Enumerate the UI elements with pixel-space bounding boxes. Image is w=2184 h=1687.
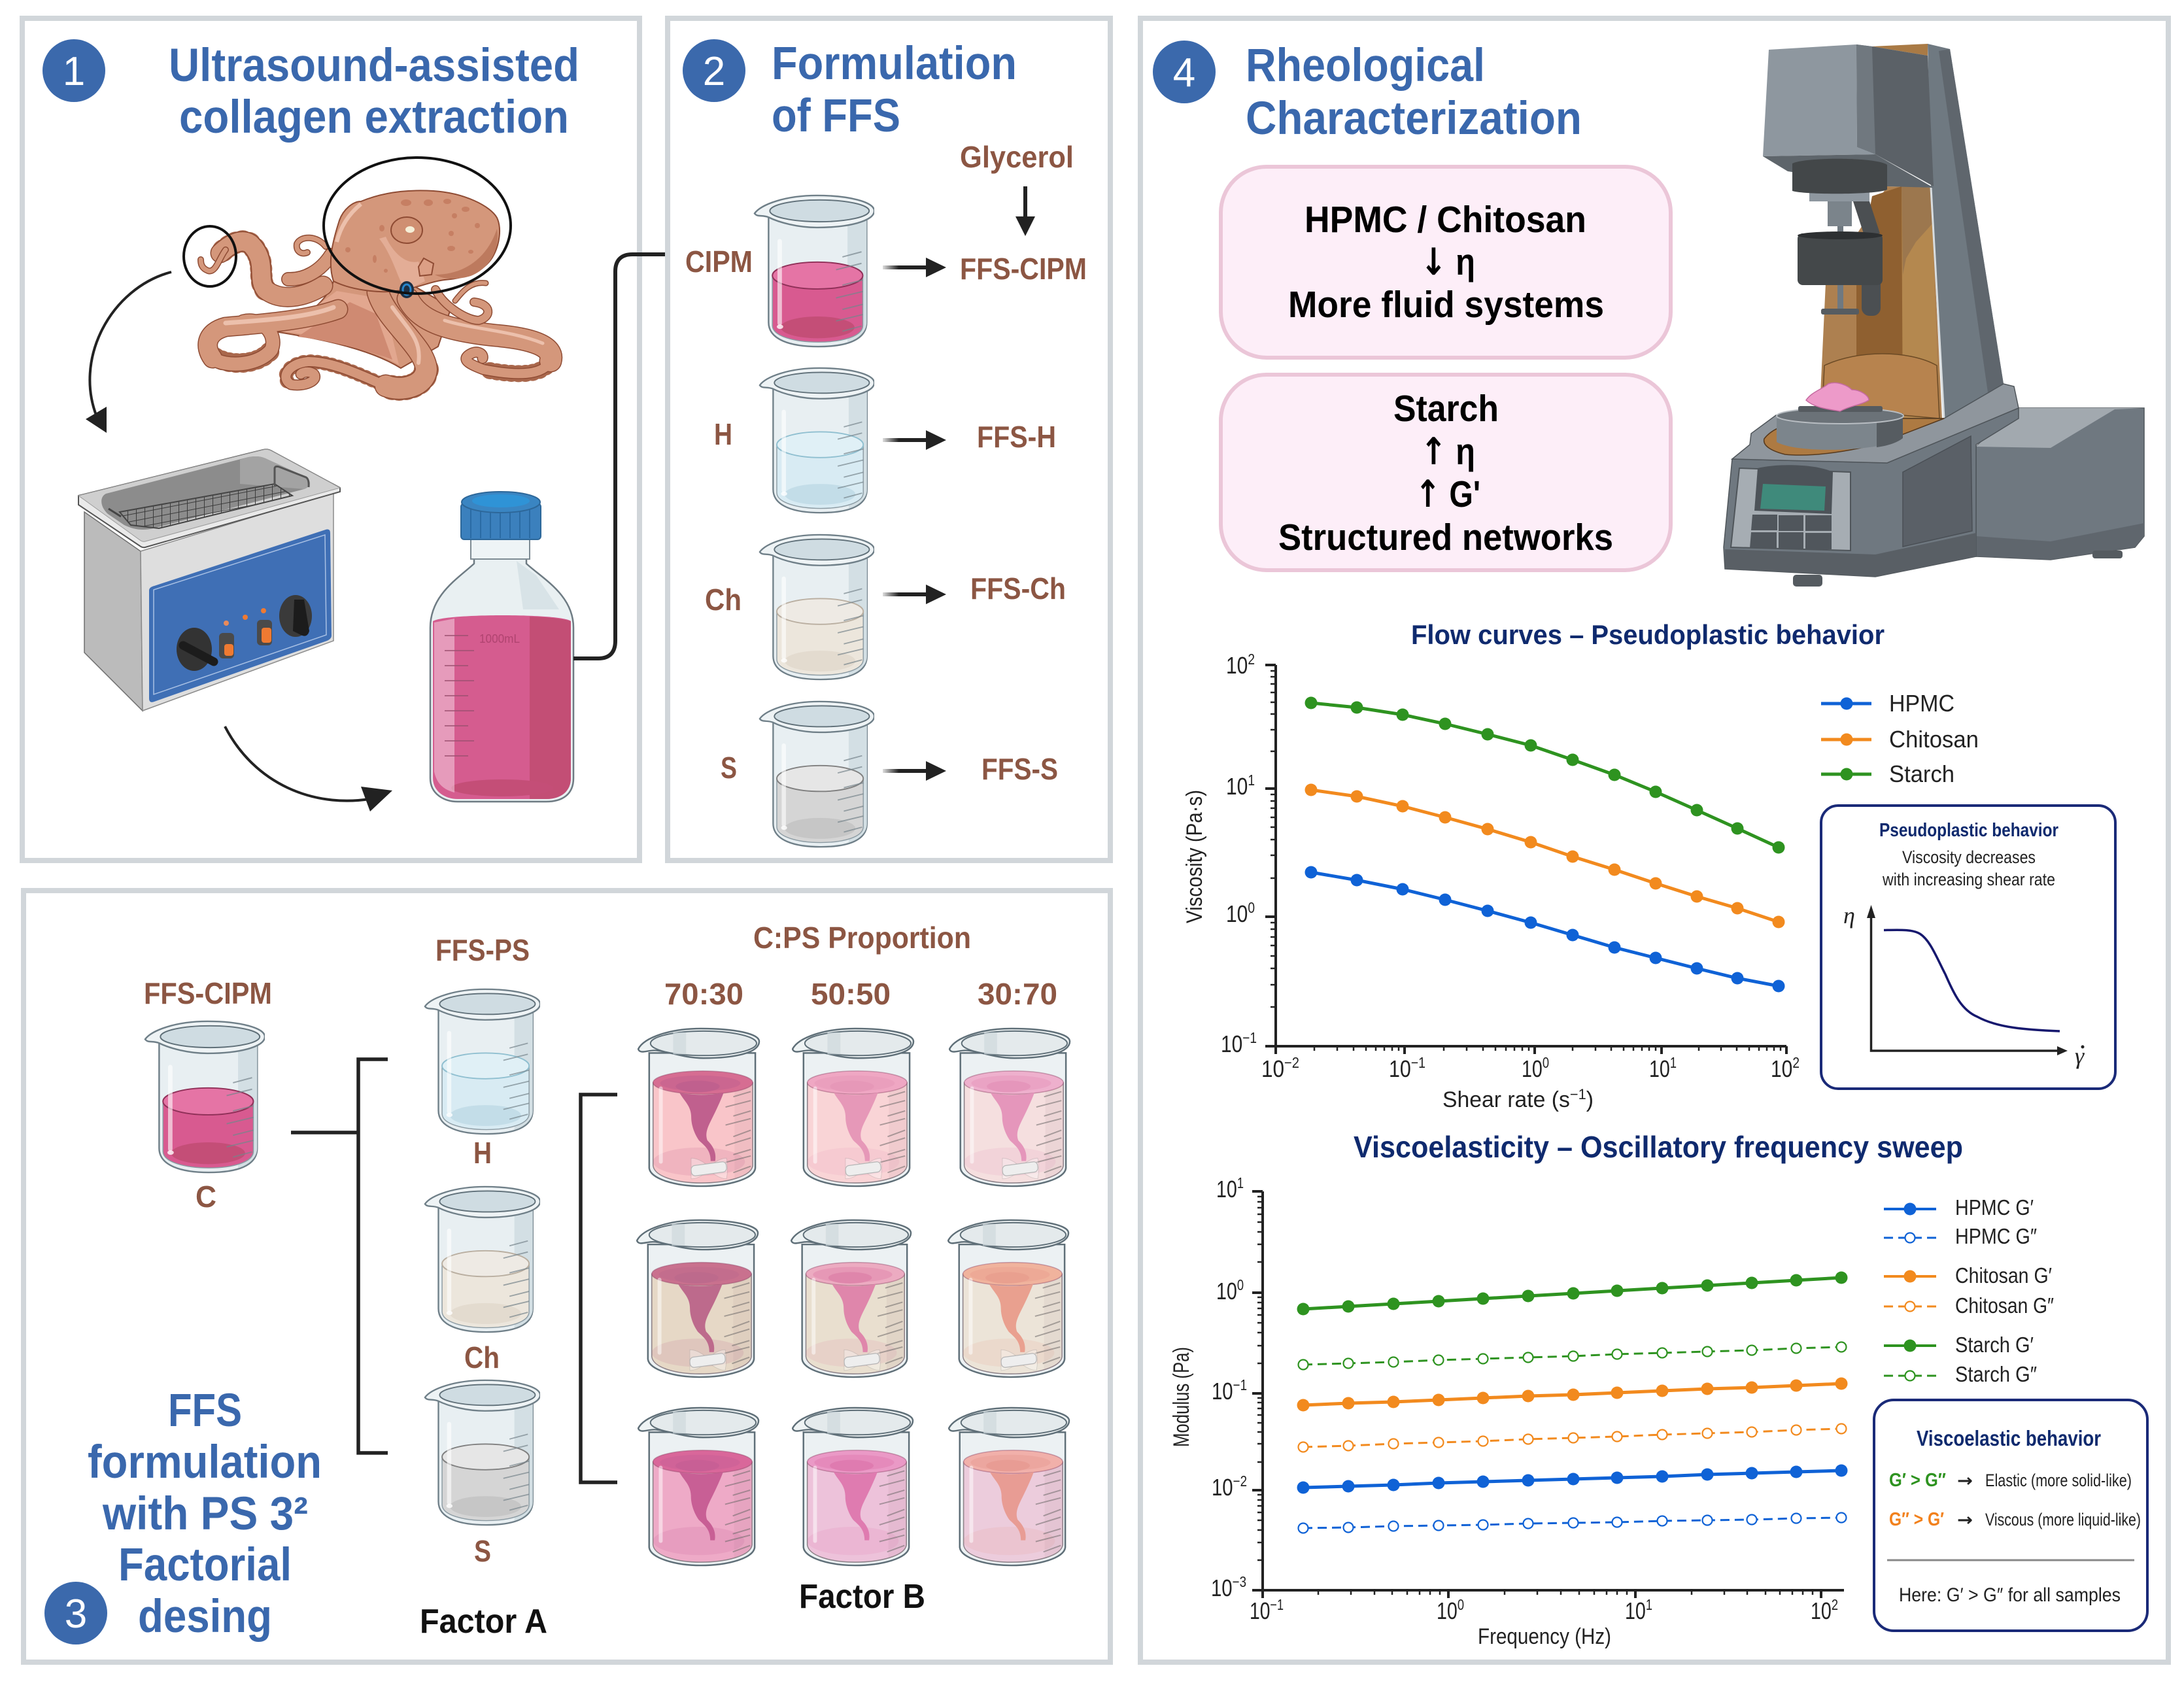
y tick labels: viscoelasticity: 10	[1216, 1278, 1242, 1304]
x tick labels: viscoelasticity: 10	[1250, 1597, 1276, 1624]
y tick labels: flow curves: 10	[1226, 900, 1252, 927]
label: FFS-CIPM: FFS-CIPM	[960, 252, 1087, 286]
axes: flow curves	[1265, 665, 1786, 1054]
label: Ch: Ch	[464, 1340, 500, 1374]
callout: starch: Structured networks	[1278, 517, 1613, 558]
label: FFS-S: FFS-S	[981, 752, 1058, 786]
callout: HPMC / chitosan: HPMC / Chitosan	[1305, 199, 1586, 241]
badge 3	[44, 1582, 107, 1644]
inset: pseudoplastic behavior: Pseudoplastic behavior	[1879, 820, 2058, 841]
heading: FFS formulation with PS 3² factorial desing: formulation	[88, 1437, 322, 1488]
y tick labels: flow curves: 10	[1226, 773, 1252, 800]
series: chitosan G''	[1303, 1429, 1841, 1447]
callout: tentacle circle	[184, 226, 236, 286]
connector: bottle to CIPM	[573, 254, 676, 658]
callout: HPMC / chitosan: More fluid systems	[1288, 284, 1604, 326]
beaker: H 30:70	[949, 1029, 1070, 1186]
chart title: flow curves: Flow curves – Pseudoplastic behavior	[1411, 619, 1885, 650]
heading: formulation of FFS	[772, 38, 1017, 142]
arrow: H to FFS-H	[883, 430, 946, 450]
legend: viscoelasticity	[1884, 1195, 2054, 1386]
inset: viscoelastic behavior: →	[1957, 1510, 1973, 1530]
axis label: modulus: Modulus (Pa)	[1169, 1347, 1194, 1447]
beaker: H	[760, 368, 874, 513]
x tick labels: flow curves: 10	[1771, 1055, 1797, 1082]
legend: viscoelasticity: Starch G″	[1955, 1362, 2037, 1386]
x tick labels: viscoelasticity: 0	[1458, 1596, 1464, 1613]
y tick labels: viscoelasticity: 1	[1237, 1174, 1244, 1191]
y tick labels: viscoelasticity: −1	[1233, 1376, 1247, 1393]
beaker: Ch 30:70	[948, 1220, 1068, 1377]
legend: flow curves: Starch	[1889, 760, 1954, 787]
heading: ultrasound-assisted collagen extraction: collagen extraction	[179, 92, 569, 143]
arrow: S to FFS-S	[883, 761, 946, 781]
badge 2	[683, 39, 745, 102]
panel 4: rheological characterization	[1140, 18, 2168, 1662]
y tick labels: viscoelasticity: −3	[1233, 1573, 1246, 1590]
label: FFS-PS: FFS-PS	[435, 933, 530, 967]
inset: pseudoplastic behavior: η	[1843, 902, 1855, 929]
x tick labels: flow curves: 0	[1543, 1054, 1549, 1071]
inset: viscoelastic behavior: Elastic (more solid-like)	[1985, 1471, 2132, 1490]
x tick labels: viscoelasticity: 10	[1625, 1597, 1651, 1624]
legend: viscoelasticity: HPMC G″	[1955, 1224, 2037, 1248]
label: S: S	[721, 751, 737, 785]
x tick labels: viscoelasticity	[1250, 1596, 1838, 1624]
heading: FFS formulation with PS 3² factorial desing: with PS 3²	[102, 1488, 308, 1540]
callout: HPMC / chitosan: ↓ η	[1420, 241, 1475, 284]
y tick labels: viscoelasticity	[1211, 1174, 1247, 1601]
callout: starch	[1221, 375, 1671, 570]
chart: flow curves	[1182, 619, 2115, 1112]
label: 30:70: 30:70	[978, 977, 1057, 1011]
callout: mantle circle	[324, 158, 511, 294]
callout: starch: ↑ η	[1420, 430, 1475, 473]
heading: rheological characterization: Rheological	[1246, 40, 1485, 92]
chart: viscoelasticity	[1169, 1130, 2147, 1649]
beaker: CIPM	[755, 196, 874, 347]
icon: pink liquid bottle: 1000mL	[479, 632, 520, 645]
x tick labels: flow curves: 1	[1670, 1054, 1677, 1071]
y tick labels: flow curves: 10	[1226, 652, 1252, 679]
label: H: H	[473, 1136, 492, 1170]
label: 70:30: 70:30	[664, 977, 743, 1011]
x tick labels: flow curves: −1	[1411, 1054, 1425, 1071]
beaker: S 70:30	[638, 1408, 759, 1565]
inset: viscoelastic behavior: Here: G′ > G″ for all samples	[1899, 1584, 2121, 1606]
beaker: S 30:70	[949, 1408, 1069, 1565]
beaker: S 50:50	[793, 1408, 913, 1565]
arrow: bath to bottle	[225, 726, 392, 811]
beaker: S	[425, 1380, 540, 1525]
x tick labels: flow curves: 2	[1792, 1054, 1800, 1071]
inset: pseudoplastic behavior: γ	[2075, 1043, 2085, 1069]
x tick labels: flow curves: 10	[1261, 1055, 1288, 1082]
inset: viscoelastic behavior	[1874, 1400, 2147, 1631]
beaker: H 70:30	[638, 1029, 759, 1186]
x tick labels: viscoelasticity: 2	[1832, 1596, 1838, 1613]
chart title: viscoelasticity: Viscoelasticity – Oscillatory frequency sweep	[1354, 1130, 1963, 1164]
inset: viscoelastic behavior: G″ > G′	[1889, 1509, 1944, 1530]
bracket: C to factor A	[291, 1059, 388, 1453]
icon: pink liquid bottle	[430, 492, 573, 802]
label: FFS-H: FFS-H	[977, 420, 1056, 454]
y tick labels: flow curves: 0	[1248, 899, 1255, 916]
grid of stirred beakers	[637, 1029, 1070, 1565]
axes: viscoelasticity	[1252, 1191, 1844, 1598]
series: HPMC G''	[1303, 1518, 1841, 1528]
series: chitosan viscosity	[1311, 790, 1779, 922]
bracket: factor A to factor B	[581, 1095, 617, 1482]
axis label: viscosity: Viscosity (Pa·s)	[1182, 790, 1207, 923]
x tick labels: viscoelasticity: 1	[1646, 1596, 1652, 1613]
y tick labels: viscoelasticity: 10	[1212, 1474, 1238, 1501]
series: chitosan G'	[1303, 1384, 1841, 1405]
heading: rheological characterization: Characterization	[1246, 93, 1582, 145]
x tick labels: flow curves: 10	[1389, 1055, 1415, 1082]
callout: starch: ↑ G'	[1415, 473, 1480, 516]
inset: viscoelastic behavior: Viscous (more liquid-like)	[1985, 1510, 2141, 1529]
inset: pseudoplastic behavior	[1821, 806, 2115, 1089]
badge 1: 1	[63, 49, 85, 94]
y tick labels: flow curves: 2	[1248, 651, 1255, 668]
label: factor A: Factor A	[420, 1603, 547, 1641]
panel 2: formulation of FFS	[668, 18, 1110, 861]
y tick labels: viscoelasticity: 10	[1212, 1378, 1238, 1405]
x tick labels: flow curves	[1261, 1054, 1800, 1082]
legend: flow curves	[1821, 690, 1979, 787]
x tick labels: flow curves: 10	[1649, 1055, 1675, 1082]
arrow: CIPM to FFS-CIPM	[883, 258, 946, 277]
label: factor B: Factor B	[799, 1578, 925, 1616]
label: Ch: Ch	[705, 583, 742, 617]
panel 1: ultrasound-assisted collagen extraction	[22, 18, 676, 861]
x tick labels: viscoelasticity: 10	[1437, 1597, 1463, 1624]
axis label: shear rate: −1	[1570, 1086, 1586, 1102]
y tick labels: flow curves: −1	[1242, 1029, 1257, 1046]
inset: viscoelastic behavior: G′ > G″	[1889, 1470, 1946, 1491]
beaker: Ch 70:30	[637, 1220, 758, 1377]
icon: rheometer	[1724, 44, 2144, 587]
series: starch G''	[1303, 1347, 1841, 1365]
label: CIPM: CIPM	[685, 245, 753, 279]
panel 3: FFS formulation factorial design	[24, 891, 1110, 1662]
badge 2: 2	[703, 49, 725, 94]
label: C:PS proportion: C:PS Proportion	[753, 921, 971, 955]
icon: octopus	[201, 190, 551, 388]
legend: viscoelasticity: Chitosan G′	[1955, 1263, 2052, 1287]
badge 3: 3	[65, 1592, 87, 1637]
badge 1	[43, 39, 105, 102]
inset: viscoelastic behavior: →	[1957, 1471, 1973, 1491]
badge 4: 4	[1173, 50, 1195, 95]
heading: ultrasound-assisted collagen extraction	[169, 40, 579, 143]
series: HPMC viscosity	[1311, 872, 1779, 986]
beaker: Ch 50:50	[791, 1220, 911, 1377]
label: glycerol: Glycerol	[960, 140, 1074, 174]
beaker: Ch	[425, 1187, 540, 1332]
y tick labels: viscoelasticity: 10	[1211, 1575, 1237, 1601]
beaker: S	[760, 702, 874, 847]
label: 50:50: 50:50	[811, 977, 891, 1011]
badge 4	[1153, 41, 1216, 103]
series: starch G'	[1303, 1278, 1841, 1309]
legend: flow curves: Chitosan	[1889, 726, 1979, 753]
label: FFS-CIPM: FFS-CIPM	[144, 976, 272, 1010]
series: HPMC G'	[1303, 1471, 1841, 1488]
callout: HPMC / chitosan	[1221, 167, 1671, 358]
y tick labels: flow curves	[1221, 651, 1257, 1057]
heading: formulation of FFS: of FFS	[772, 90, 900, 142]
arrow: glycerol	[1015, 186, 1035, 236]
inset: pseudoplastic behavior: with increasing shear rate	[1882, 870, 2055, 889]
x tick labels: flow curves: 10	[1522, 1055, 1548, 1082]
beaker: C	[145, 1021, 265, 1172]
label: FFS-Ch: FFS-Ch	[970, 571, 1066, 605]
heading: formulation of FFS: Formulation	[772, 38, 1017, 90]
x tick labels: viscoelasticity: 10	[1811, 1597, 1837, 1624]
legend: viscoelasticity: Starch G′	[1955, 1333, 2034, 1357]
y tick labels: flow curves: 1	[1248, 772, 1255, 789]
label: S: S	[474, 1534, 491, 1568]
callout: starch: Starch	[1393, 388, 1499, 430]
y tick labels: viscoelasticity: 0	[1237, 1276, 1244, 1293]
y tick labels: viscoelasticity: −2	[1233, 1473, 1247, 1490]
label: H: H	[714, 417, 732, 451]
heading: FFS formulation with PS 3² factorial desing: Factorial	[118, 1539, 292, 1591]
label: C: C	[196, 1180, 216, 1214]
icon: ultrasonic bath	[78, 449, 340, 711]
heading: rheological characterization	[1246, 40, 1582, 145]
arrow: Ch to FFS-Ch	[883, 585, 946, 604]
series: starch viscosity	[1311, 703, 1779, 847]
heading: FFS formulation with PS 3² factorial desing: FFS	[168, 1385, 242, 1437]
beaker: H	[425, 989, 540, 1134]
beaker: Ch	[760, 535, 874, 679]
inset: viscoelastic behavior: Viscoelastic behavior	[1917, 1426, 2101, 1450]
axis label: frequency: Frequency (Hz)	[1478, 1624, 1611, 1649]
x tick labels: flow curves: −2	[1284, 1054, 1299, 1071]
axis label: shear rate: )	[1586, 1087, 1594, 1112]
inset: pseudoplastic behavior: Viscosity decreases	[1902, 847, 2036, 867]
y tick labels: flow curves: 10	[1221, 1031, 1247, 1057]
heading: ultrasound-assisted collagen extraction: Ultrasound-assisted	[169, 40, 579, 92]
arrow: octopus to bath	[86, 272, 171, 433]
legend: flow curves: HPMC	[1889, 690, 1954, 717]
legend: viscoelasticity: HPMC G′	[1955, 1195, 2034, 1219]
y tick labels: viscoelasticity: 10	[1216, 1176, 1242, 1202]
heading: FFS formulation with PS 3² factorial desing: desing	[138, 1591, 272, 1643]
x tick labels: viscoelasticity: −1	[1270, 1596, 1284, 1613]
beaker: H 50:50	[793, 1029, 913, 1186]
axis label: shear rate: Shear rate (s	[1442, 1087, 1571, 1112]
legend: viscoelasticity: Chitosan G″	[1955, 1293, 2054, 1318]
heading: FFS formulation with PS 3² factorial desing	[88, 1385, 322, 1643]
